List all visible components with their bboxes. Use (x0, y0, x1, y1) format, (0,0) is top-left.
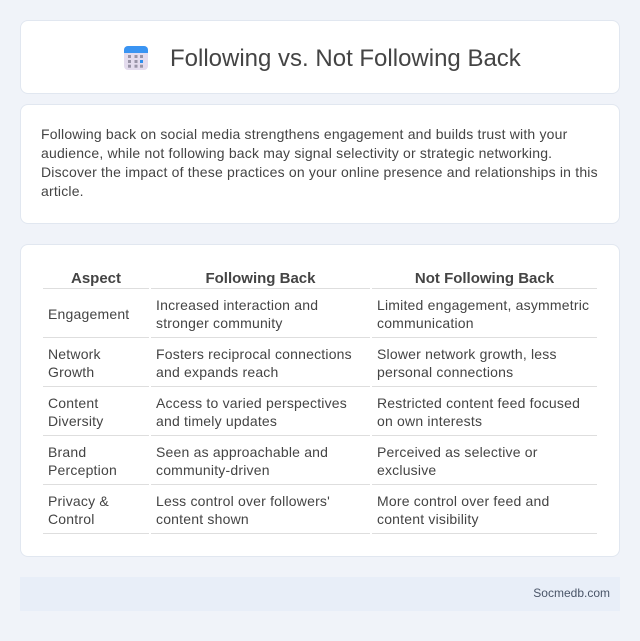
intro text (41, 126, 598, 199)
row: Privacy & Control: Control (48, 511, 95, 527)
row: Content Diversity: Diversity (48, 413, 103, 429)
row: Network Growth (48, 346, 557, 380)
row: Engagement: Limited engagement, asymmetric (377, 297, 589, 313)
row: Content Diversity (48, 395, 580, 429)
row: Privacy & Control: content visibility (377, 511, 479, 527)
row: Network Growth: and expands reach (156, 364, 278, 380)
intro text: article. (41, 183, 84, 199)
table header: Aspect: Aspect (71, 270, 121, 287)
row: Network Growth: Slower network growth, less (377, 346, 557, 362)
row: Brand Perception: community-driven (156, 462, 270, 478)
row: Brand Perception: Brand (48, 444, 86, 460)
row: Brand Perception: exclusive (377, 462, 436, 478)
row: Content Diversity: on own interests (377, 413, 482, 429)
row: Engagement: Engagement (48, 306, 129, 322)
row: Brand Perception: Seen as approachable and (156, 444, 328, 460)
row: Network Growth: personal connections (377, 364, 513, 380)
row: Network Growth: Growth (48, 364, 94, 380)
row: Content Diversity: Access to varied perspectives (156, 395, 347, 411)
footer bar (20, 577, 620, 611)
table header: Following Back: Following Back (205, 270, 316, 287)
intro text: audience, while not following back may signal selectivity or strategic networking. (41, 145, 552, 161)
row: Engagement: stronger community (156, 315, 283, 331)
row: Engagement: Increased interaction and (156, 297, 318, 313)
row: Brand Perception: Perception (48, 462, 117, 478)
row: Privacy & Control: Less control over followers' (156, 493, 330, 509)
row: Content Diversity: Restricted content feed focused (377, 395, 580, 411)
title: Following vs. Not Following Back (170, 45, 521, 72)
row: Engagement (48, 297, 589, 331)
table header: Not Following Back: Not Following Back (415, 270, 554, 287)
intro text: Following back on social media strengthens engagement and builds trust with your (41, 126, 568, 142)
row: Network Growth: Fosters reciprocal connections (156, 346, 352, 362)
row: Content Diversity: and timely updates (156, 413, 277, 429)
row: Engagement: communication (377, 315, 474, 331)
panel: title card (20, 20, 620, 94)
icon: calendar (124, 46, 148, 70)
panel: introduction (20, 104, 620, 224)
intro text: Discover the impact of these practices on your online presence and relationships in this (41, 164, 598, 180)
row: Brand Perception (48, 444, 538, 478)
row: Content Diversity: Content (48, 395, 98, 411)
panel: comparison table (20, 244, 620, 557)
row: Privacy & Control (48, 493, 550, 527)
row: Network Growth: Network (48, 346, 101, 362)
row: Privacy & Control: More control over feed and (377, 493, 550, 509)
row: Privacy & Control: content shown (156, 511, 249, 527)
footer text: Socmedb.com (533, 586, 610, 600)
row: Privacy & Control: Privacy & (48, 493, 109, 509)
row: Brand Perception: Perceived as selective or (377, 444, 538, 460)
